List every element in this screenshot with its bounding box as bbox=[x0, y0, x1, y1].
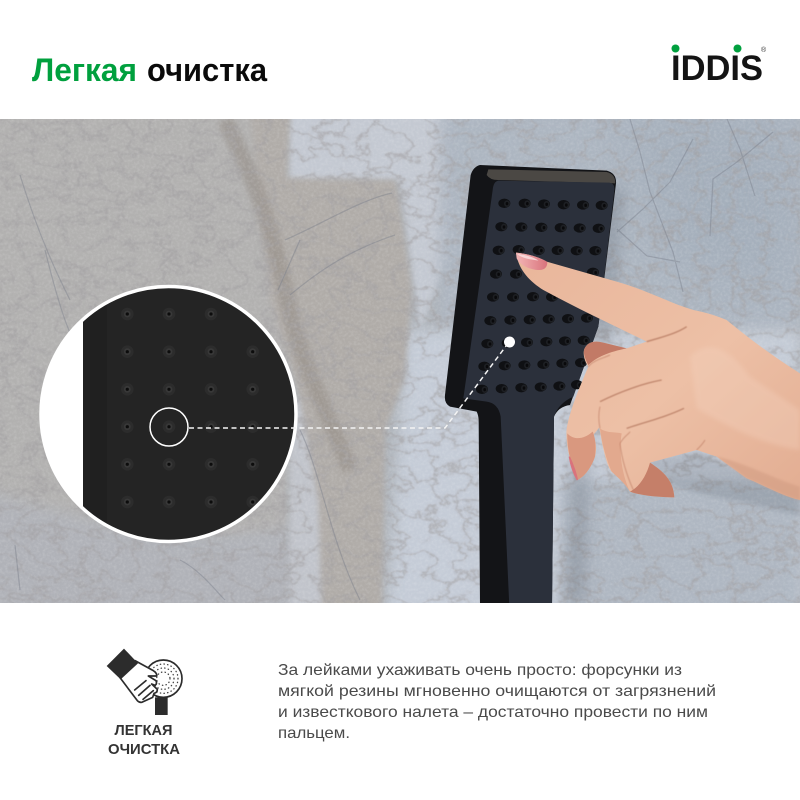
finger crease lines bbox=[600, 327, 687, 428]
shower head circle bbox=[145, 660, 182, 697]
hand shadow on wall bbox=[643, 452, 800, 517]
photo panel: marble wall with shower head bbox=[0, 119, 800, 603]
nozzles bbox=[476, 199, 608, 394]
folded finger shading bbox=[584, 342, 627, 365]
hand silhouette bbox=[516, 253, 800, 500]
title: очистка bbox=[147, 52, 267, 88]
magnified lens circle bbox=[40, 280, 303, 550]
description text bbox=[278, 662, 716, 742]
shower handle bbox=[155, 697, 168, 715]
icon label: ЛЕГКАЯ bbox=[114, 722, 172, 739]
marble background bbox=[0, 119, 800, 603]
description text: пальцем. bbox=[278, 725, 350, 742]
logo: IDDIS: IDDIS bbox=[671, 49, 763, 88]
wall veins bbox=[15, 119, 773, 600]
description text: и известкового налета – достаточно провести по ним bbox=[278, 704, 708, 721]
icon: hand cleaning shower head bbox=[107, 649, 182, 715]
lens nozzles bbox=[121, 308, 259, 508]
top bevel bbox=[487, 169, 615, 183]
finger lines bbox=[135, 681, 153, 699]
index fingernail bbox=[516, 253, 547, 270]
hand outline bbox=[120, 661, 157, 702]
dashed leader line bbox=[189, 342, 509, 428]
leader dot bbox=[504, 336, 515, 348]
title bbox=[32, 52, 267, 88]
knuckle highlights bbox=[690, 347, 800, 450]
description text: За лейками ухаживать очень просто: форсунки из bbox=[278, 662, 682, 679]
shower head bbox=[445, 165, 616, 607]
head body bbox=[445, 165, 616, 607]
cuff bbox=[107, 649, 138, 679]
title: Легкая bbox=[32, 52, 137, 88]
highlight ring bbox=[150, 408, 188, 446]
logo: IDDIS: ® bbox=[761, 46, 767, 54]
icon label bbox=[108, 722, 180, 758]
spray face bbox=[463, 181, 614, 607]
shadow of shower head bbox=[565, 180, 625, 603]
hand bbox=[516, 253, 800, 517]
spray dots bbox=[149, 664, 178, 693]
description text: мягкой резины мгновенно очищаются от загрязнений bbox=[278, 683, 716, 700]
icon label: ОЧИСТКА bbox=[108, 741, 180, 758]
lower fingernail bbox=[569, 457, 577, 480]
